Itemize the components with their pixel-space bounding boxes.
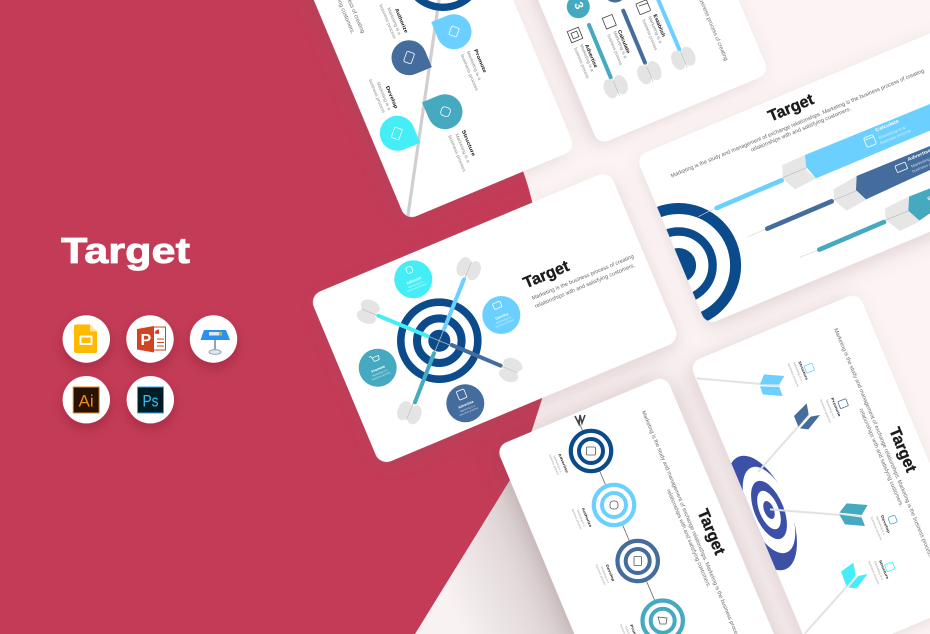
slide labels: Marketing is a	[454, 133, 471, 164]
arrows	[697, 374, 868, 633]
arrow: Advertise	[748, 146, 930, 237]
number circles	[567, 0, 626, 18]
teardrop: Promote	[431, 9, 477, 55]
slide paragraph: Marketing is the study and management of exchange relationships. Marketing is the business process of creating	[670, 68, 925, 180]
slide title: Target	[766, 91, 817, 125]
slide labels: business process	[447, 134, 467, 173]
icon: Photoshop: Ps	[142, 392, 158, 410]
number circles: 3	[571, 0, 587, 12]
slide labels: Marketing is a	[612, 30, 628, 59]
arrow: light blue	[697, 374, 784, 396]
arrow: teal	[770, 503, 868, 526]
slide title: Target	[694, 507, 728, 558]
slide labels: business process	[595, 564, 607, 586]
circle: Develop	[476, 290, 526, 340]
target: teal	[640, 598, 685, 634]
center target	[401, 302, 478, 379]
slide labels: Marketing is a	[552, 455, 563, 473]
slide labels: Advertise	[583, 43, 598, 69]
shadow area below bottom card	[400, 447, 590, 634]
panel: center slide with radial darts	[309, 170, 680, 466]
slide labels: business process	[571, 508, 583, 531]
slide labels: Marketing is a	[600, 566, 611, 584]
icon: Photoshop	[127, 376, 174, 423]
dart: top	[439, 255, 484, 341]
circle: Develop: Marketing is a	[495, 315, 512, 325]
teardrop: Structure	[422, 89, 468, 135]
slide labels: Structure	[797, 361, 809, 381]
slide labels: Promote	[472, 48, 487, 74]
vertical shaft	[407, 0, 439, 220]
target: light blue	[592, 483, 636, 527]
circle: Promote: Promote	[371, 364, 386, 374]
slide labels: Calculate	[616, 29, 631, 55]
teardrop icons	[391, 26, 459, 140]
circle: Develop: business process	[495, 317, 515, 329]
slide labels: Marketing is a	[579, 43, 595, 73]
slide labels: business process	[606, 33, 624, 67]
slide labels: Develop	[384, 85, 399, 110]
circle: Adhesive: Marketing is a	[407, 279, 424, 289]
slide labels: business process	[867, 561, 881, 586]
icon: Keynote	[190, 315, 237, 363]
panel icons	[863, 134, 908, 173]
icon: Illustrator	[63, 376, 110, 423]
slide labels: Structure	[460, 129, 476, 158]
slide labels: Promote	[830, 397, 841, 417]
slide paragraph: relationships with and satisfying customers.	[665, 488, 711, 589]
heading: Target: Target	[61, 230, 190, 271]
slide labels: business process	[641, 18, 659, 52]
dart bars	[589, 0, 679, 77]
dart: bottom	[394, 341, 439, 427]
panel text	[874, 118, 930, 201]
slide labels: Marketing is a	[792, 362, 804, 382]
panel: top-center slide with darts	[471, 0, 769, 145]
icon: arrow fletching	[575, 415, 585, 424]
slide labels: Marketing is a	[376, 81, 392, 111]
slide labels: Establish	[651, 13, 666, 38]
circle: Adhesive	[388, 254, 438, 304]
slide labels: Marketing is a	[825, 399, 836, 419]
slide labels: business process	[819, 399, 833, 424]
slide labels: Develop	[605, 564, 616, 583]
dart: right	[439, 341, 524, 385]
slide labels: Marketing is a	[873, 561, 885, 581]
panel text: Marketing is a	[878, 125, 906, 140]
slide labels	[787, 361, 891, 586]
slide labels: Marketing is a	[647, 15, 663, 44]
panel text: Advertise	[907, 147, 930, 162]
connecting line	[578, 420, 680, 634]
slide labels	[368, 3, 487, 173]
circle: Advertise	[440, 378, 490, 428]
slide labels: Structure	[878, 560, 889, 580]
arrow: Calculate	[698, 104, 930, 217]
slide title: Target	[521, 258, 572, 292]
slide labels: Authorize	[581, 507, 592, 528]
circle: Advertise: business process	[459, 405, 479, 417]
icon: Google Slides	[63, 315, 110, 363]
slide labels: Authorize	[393, 8, 409, 34]
icon: PowerPoint	[126, 315, 174, 363]
crimson panel	[0, 0, 550, 634]
slide labels: Marketing is a	[576, 509, 587, 527]
panel: right slide with big target and arrows	[622, 29, 930, 325]
arrow: cyan	[805, 563, 868, 633]
slide labels: Develop	[880, 515, 891, 535]
slide labels: business process	[378, 3, 398, 40]
teardrop: Develop	[374, 110, 420, 156]
dart arrows	[698, 104, 930, 257]
panel text: business process	[880, 129, 912, 145]
target: dark blue	[569, 429, 613, 473]
slide labels: business process	[368, 78, 387, 114]
slide labels: Marketing is a	[466, 50, 483, 81]
arrow: dark blue	[758, 403, 820, 472]
slide labels	[573, 13, 666, 80]
arrow: Structure	[800, 188, 930, 257]
circle: Promote: business process	[371, 370, 392, 382]
icon: Illustrator: Ai	[78, 392, 94, 410]
slide labels: business process	[787, 363, 800, 388]
panel: lower-right slide with arrows into tilted target	[689, 292, 930, 634]
circle: Promote: Marketing is a	[372, 368, 389, 378]
dart: left	[355, 297, 439, 341]
icons	[804, 363, 898, 572]
panel text: Calculate	[874, 118, 900, 133]
circle: Promote	[353, 343, 403, 393]
slide labels: business process	[870, 516, 883, 541]
teardrop: Authorize	[386, 35, 432, 81]
circle: Develop: Develop	[495, 312, 510, 321]
outline icons	[567, 0, 651, 43]
circle: Adhesive: business process	[407, 281, 427, 293]
panel: top-left slide with teardrops	[310, 0, 572, 218]
slide labels: Marketing is a	[875, 516, 887, 536]
slide labels: business process	[573, 47, 591, 80]
circle: Advertise: Advertise	[458, 400, 474, 410]
slide labels	[548, 453, 640, 634]
big target	[657, 203, 742, 321]
circle: Adhesive: Adhesive	[406, 276, 422, 286]
slide labels: business process	[460, 53, 480, 92]
slide paragraph: Marketing is the business process of creating	[531, 254, 635, 302]
slide labels: Marketing is a	[386, 7, 402, 36]
tilted target	[731, 456, 797, 570]
slide title: Target	[885, 425, 919, 476]
target: steel blue	[615, 539, 660, 583]
icon: PowerPoint: P	[140, 332, 152, 349]
dart feathers	[601, 44, 698, 101]
slide paragraph: relationships with and satisfying customers.	[857, 408, 904, 508]
circle: Advertise: Marketing is a	[459, 403, 476, 413]
slide paragraph: relationships with and satisfying customers.	[534, 262, 637, 310]
panel: bottom slide with target chain	[496, 376, 793, 634]
target arc	[405, 0, 481, 7]
slide paragraph: relationships with and satisfying customers.	[750, 106, 853, 154]
slide labels: business process	[548, 454, 560, 476]
slide labels: Advertise	[557, 453, 569, 473]
